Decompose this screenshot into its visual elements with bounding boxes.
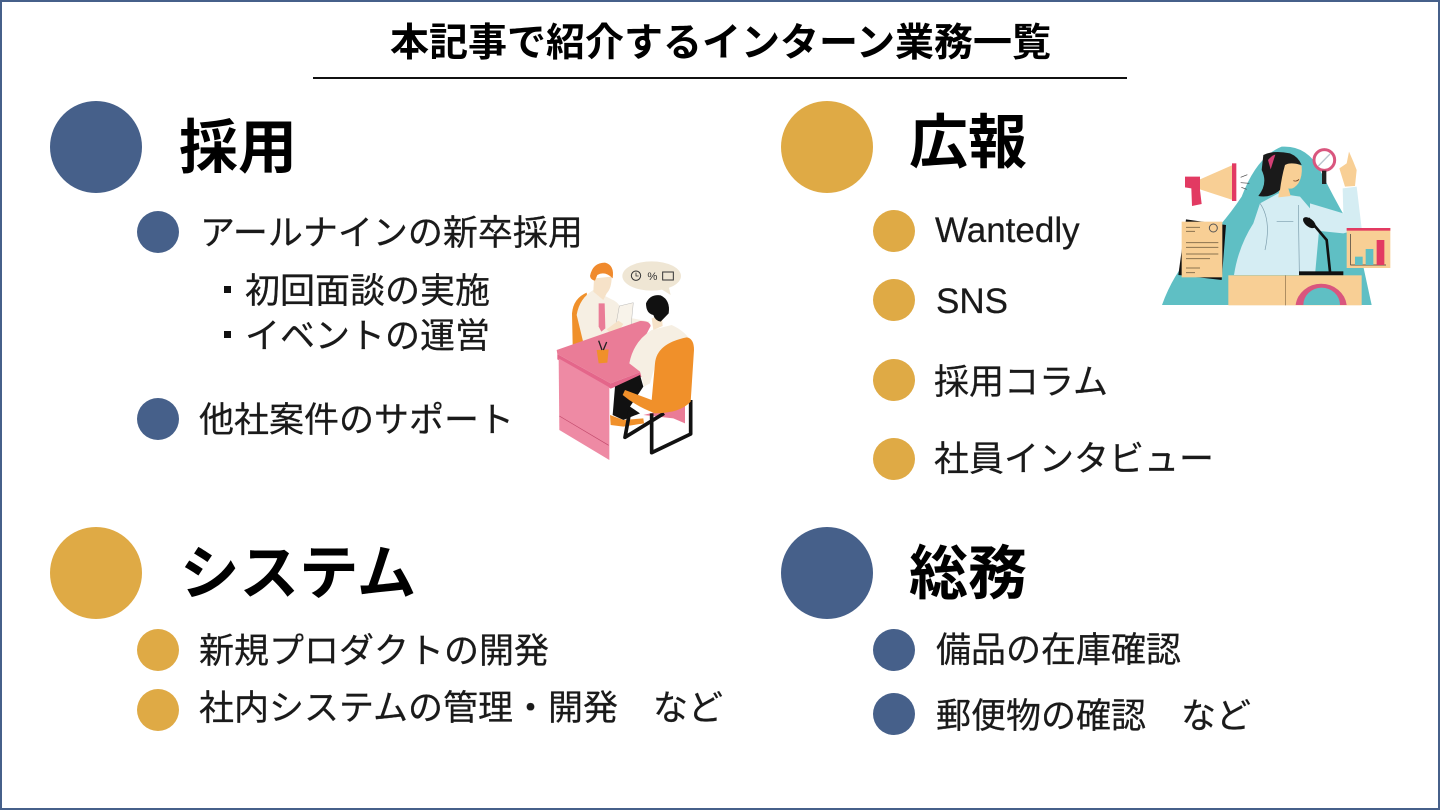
torso (1234, 193, 1320, 275)
face (1278, 163, 1302, 197)
megaphone (1200, 165, 1233, 200)
icon: 総務 circle (781, 527, 873, 619)
icon: システム circle (50, 527, 142, 619)
bullet: 郵便物 (873, 693, 915, 735)
text: Wantedly: Wantedly (935, 211, 1080, 250)
bullet: Wantedly (873, 210, 915, 252)
heading: 採用: 採用 (179, 115, 297, 181)
seated person head (652, 315, 663, 330)
panel: 広報 (781, 101, 1214, 480)
sub-bullet: 初回面談の実施: 初回面談の実施 (245, 272, 490, 311)
icon: 広報 circle (781, 101, 873, 193)
pencil cup (597, 349, 609, 363)
bullet: 社員インタビュー (873, 438, 915, 480)
illustration: spokesperson at a podium (1162, 146, 1390, 306)
bullet: 採用コラム (873, 359, 915, 401)
icon: 採用 circle (50, 101, 142, 193)
desk back panel (643, 405, 685, 423)
arm (1310, 187, 1362, 233)
gear (1296, 284, 1347, 305)
sub-bullet: イベントの運営: イベントの運営 (245, 317, 490, 356)
text: 採用コラム: 採用コラム (934, 363, 1108, 402)
bar chart card (1347, 228, 1390, 268)
bullet: 備品 (873, 629, 915, 671)
magnifier (1314, 150, 1335, 170)
document (1178, 219, 1226, 280)
desk top (557, 321, 651, 383)
text: アールナインの新卒採用: アールナインの新卒採用 (200, 214, 583, 253)
podium (1228, 275, 1362, 305)
bullet: 社内システム (137, 689, 179, 731)
bullet: 新卒採用 (137, 211, 179, 253)
back chair (572, 293, 593, 345)
trousers and shoes (613, 375, 643, 420)
illustration: interview at a pink desk (556, 261, 694, 460)
title: 本記事で紹介するインターン業務一覧 (390, 22, 1051, 65)
text: 他社案件のサポート: 他社案件のサポート (199, 401, 514, 440)
text: 郵便物の確認 など: 郵便物の確認 など (936, 697, 1251, 736)
illustration: interview at a pink desk: % (647, 271, 657, 283)
chair legs (625, 400, 691, 453)
heading: 総務: 総務 (909, 541, 1027, 607)
paper (615, 303, 633, 330)
teal backdrop (1162, 147, 1372, 305)
heading: システム: システム (180, 540, 416, 607)
microphone (1308, 218, 1330, 272)
text: 社内システムの管理・開発 など: 社内システムの管理・開発 など (199, 689, 723, 728)
hair (1258, 152, 1302, 197)
bullet: 他社案件 (137, 398, 179, 440)
text: 社員インタビュー: 社員インタビュー (934, 440, 1214, 479)
text: 新規プロダクトの開発: 新規プロダクトの開発 (199, 632, 549, 671)
bullet: 新規プロダクト (137, 629, 179, 671)
heading: 広報: 広報 (909, 110, 1027, 176)
shirt details (1260, 203, 1299, 273)
text: SNS: SNS (936, 282, 1008, 321)
hand (1339, 152, 1357, 187)
bullet: SNS (873, 279, 915, 321)
seated person body (629, 325, 692, 387)
text: 備品の在庫確認: 備品の在庫確認 (936, 631, 1181, 670)
panel: 採用 (50, 101, 583, 440)
interviewer body (577, 290, 650, 350)
interviewer head (593, 277, 612, 300)
speech bubble (622, 261, 681, 291)
panel: システム (50, 527, 723, 731)
desk front (559, 358, 609, 460)
panel: 総務 (781, 527, 1251, 736)
front chair (623, 337, 694, 413)
